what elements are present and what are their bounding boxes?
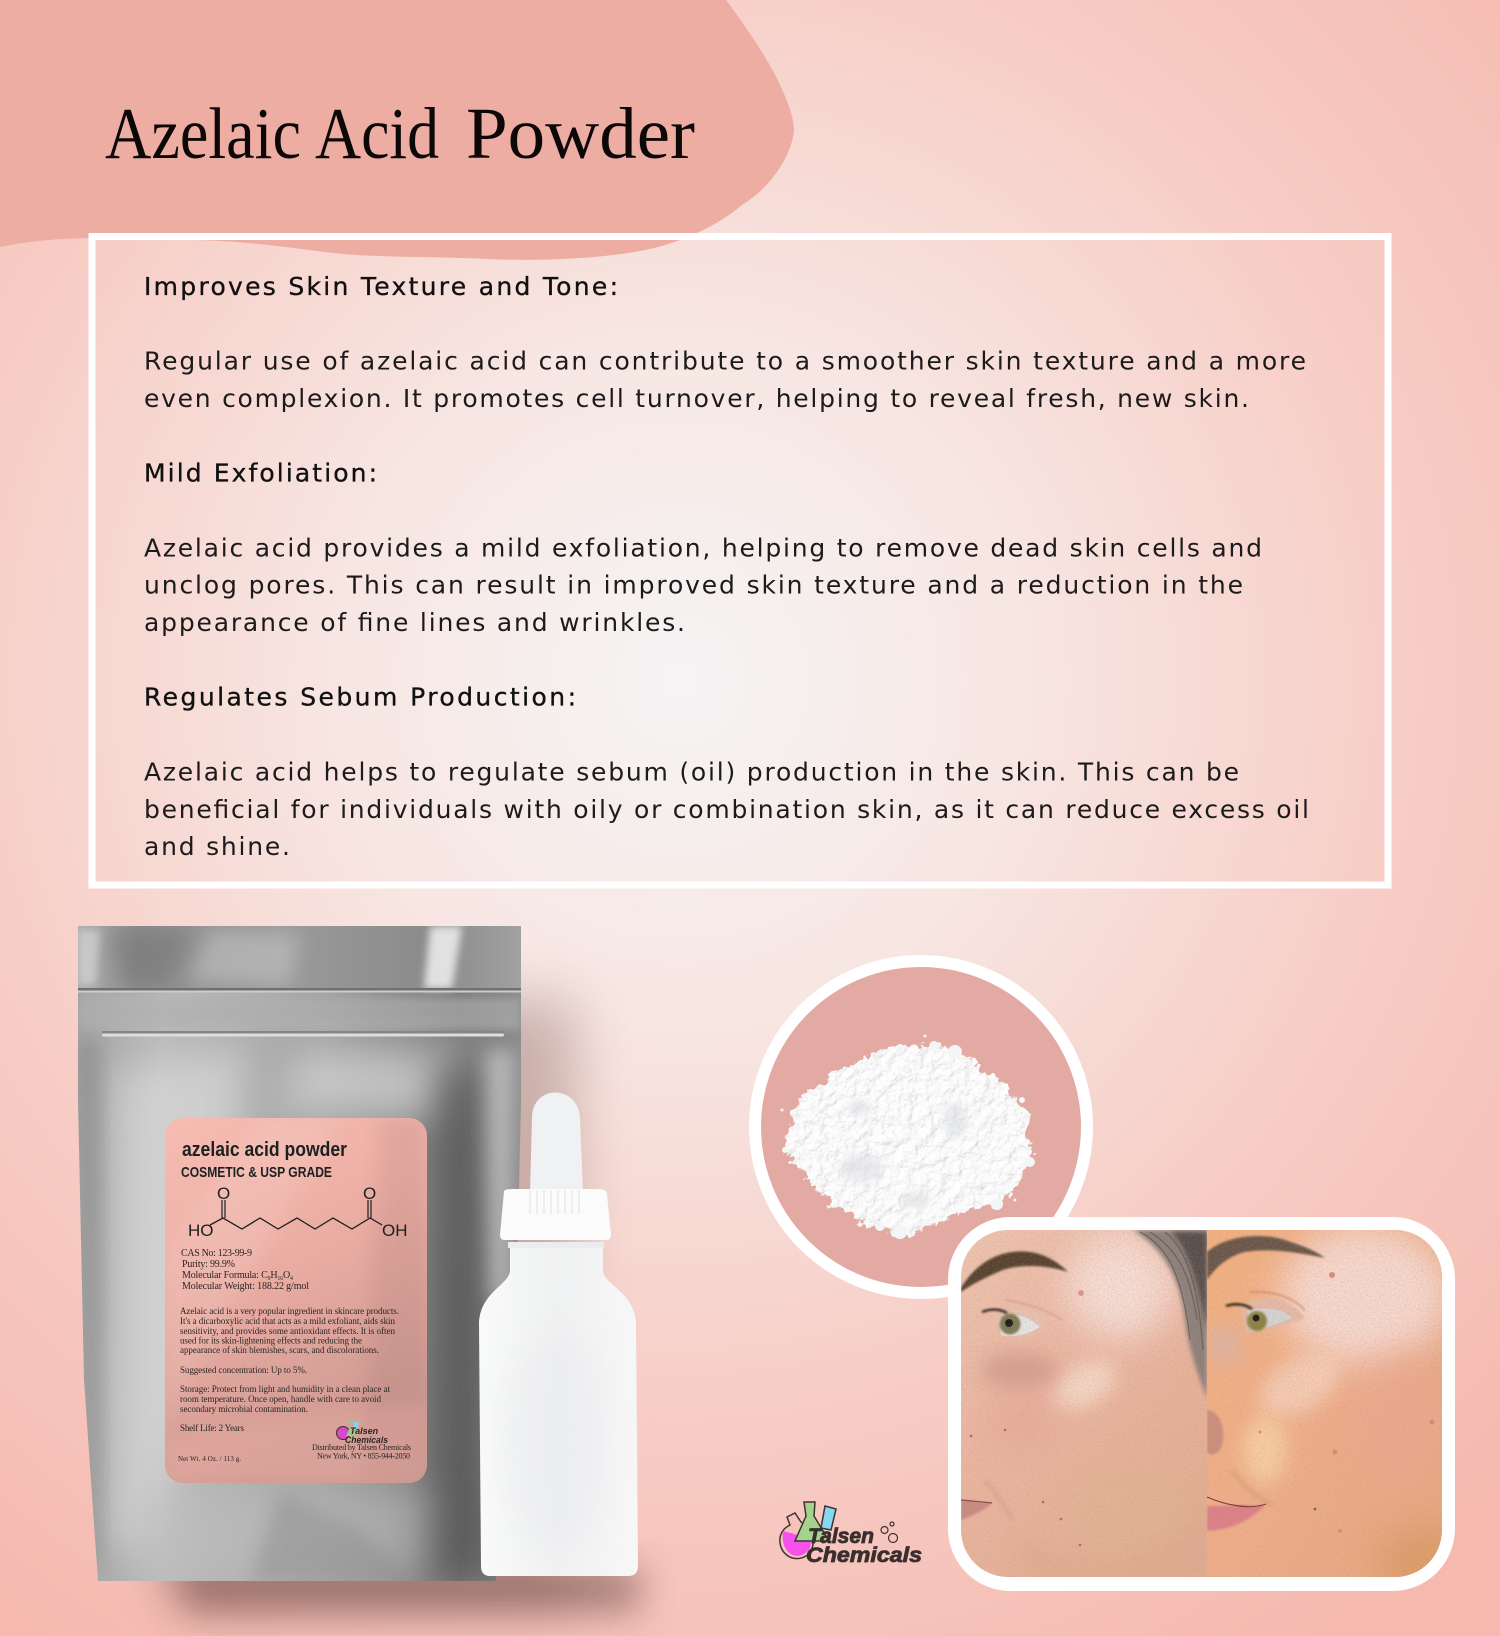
title: Azelaic	[105, 93, 301, 174]
eye	[1226, 1292, 1305, 1334]
label description: It's a dicarboxylic acid that acts as a mild exfoliant, aids skin	[180, 1316, 396, 1326]
seal highlights	[78, 926, 462, 989]
label specifications: Molecular Formula: C	[182, 1270, 268, 1281]
label description	[178, 1306, 411, 1463]
label description: Suggested concentration: Up to 5%.	[180, 1365, 307, 1375]
text block: regulates sebum: beneficial for individuals with oily or combination skin, as it can reduce excess oil	[144, 795, 1309, 824]
icon: flasks	[780, 1502, 836, 1559]
text block: regulates sebum: Azelaic acid helps to regulate sebum (oil) production in the skin. This can be	[144, 758, 1239, 786]
eye	[982, 1300, 1062, 1336]
brow	[961, 1251, 1068, 1292]
label description: used for its skin-lightening effects and reducing the	[180, 1336, 362, 1346]
icon: bubbles	[881, 1522, 898, 1542]
powder circle	[755, 961, 1087, 1293]
pouch label	[165, 1118, 427, 1483]
before and after skin photo	[954, 1224, 1470, 1600]
molecule diagram: O	[217, 1184, 230, 1203]
text block: regulates sebum: and shine.	[144, 832, 290, 861]
logo text: Talsen	[808, 1525, 874, 1548]
product pouch	[70, 926, 530, 1588]
dropper bottle	[479, 1092, 638, 1576]
brow	[1207, 1236, 1325, 1280]
header blob	[0, 0, 794, 260]
label specifications: Molecular Weight: 188.22 g/mol	[182, 1281, 309, 1292]
text block: mild exfoliation: appearance of fine lines and wrinkles.	[144, 608, 685, 637]
molecule diagram: OH	[382, 1221, 408, 1240]
label heading: azelaic acid powder	[182, 1139, 347, 1161]
text block: mild exfoliation: Azelaic acid provides a mild exfoliation, helping to remove dead skin cells and	[144, 534, 1262, 562]
label description: sensitivity, and provides some antioxidant effects. It is often	[180, 1326, 396, 1336]
label description: appearance of skin blemishes, scars, and discolorations.	[180, 1345, 379, 1355]
label mini logo: Talsen	[350, 1426, 379, 1436]
text block: improves skin texture	[144, 346, 1306, 413]
panel: benefits text box	[92, 236, 1388, 885]
label specifications: CAS No: 123-99-9	[181, 1248, 252, 1259]
heading: mild exfoliation: Mild Exfoliation:	[144, 458, 377, 488]
title: Acid	[315, 93, 439, 174]
shadow of pouch and bottle	[130, 1000, 640, 1612]
label specifications: O	[283, 1270, 290, 1281]
nose	[1207, 1410, 1223, 1454]
molecule diagram: HO	[188, 1221, 214, 1240]
before face	[961, 1230, 1207, 1577]
label specifications: 16	[277, 1276, 283, 1282]
text block: improves skin texture: Regular use of azelaic acid can contribute to a smoother skin texture and a more	[144, 346, 1306, 376]
label mini logo	[336, 1420, 388, 1445]
label specifications: H	[270, 1270, 278, 1281]
hair	[1133, 1230, 1207, 1398]
label subheading: COSMETIC & USP GRADE	[181, 1164, 332, 1181]
text block: mild exfoliation	[144, 534, 1262, 637]
molecule diagram	[188, 1184, 408, 1240]
molecule diagram: O	[363, 1184, 376, 1203]
label specifications: 9	[268, 1276, 271, 1282]
label mini logo: Chemicals	[345, 1435, 388, 1445]
lips	[1207, 1505, 1265, 1531]
title	[105, 93, 695, 174]
text block: regulates sebum	[144, 758, 1309, 861]
label description: New York, NY • 855-944-2050	[317, 1452, 410, 1460]
label description: Storage: Protect from light and humidity in a clean place at	[180, 1384, 390, 1394]
text block: improves skin texture: even complexion. It promotes cell turnover, helping to reveal fresh, new skin.	[144, 384, 1249, 413]
Talsen Chemicals logo	[780, 1502, 922, 1567]
label specifications: Purity: 99.9%	[182, 1259, 235, 1270]
powder pile	[780, 1034, 1035, 1239]
heading: improves skin texture and tone: Improves Skin Texture and Tone:	[144, 272, 618, 301]
label description: room temperature. Once open, handle with care to avoid	[180, 1394, 382, 1404]
label description: Distributed by Talsen Chemicals	[312, 1443, 411, 1452]
Talsen Chemicals logo: Chemicals	[806, 1544, 922, 1567]
body folds	[78, 998, 521, 1581]
heading: regulates sebum production: Regulates Sebum Production:	[144, 682, 576, 712]
label specifications: 4	[290, 1276, 293, 1282]
text block: mild exfoliation: unclog pores. This can result in improved skin texture and a reduction in the	[144, 570, 1243, 600]
label description: secondary microbial contamination.	[180, 1404, 308, 1414]
title: Powder	[466, 93, 695, 174]
label specifications	[181, 1248, 309, 1292]
lips	[961, 1500, 992, 1520]
label description: Net Wt. 4 Oz. / 113 g.	[178, 1455, 241, 1463]
label description: Azelaic acid is a very popular ingredient in skincare products.	[180, 1306, 399, 1316]
label description: Shelf Life: 2 Years	[180, 1423, 244, 1433]
after face	[1207, 1230, 1442, 1577]
